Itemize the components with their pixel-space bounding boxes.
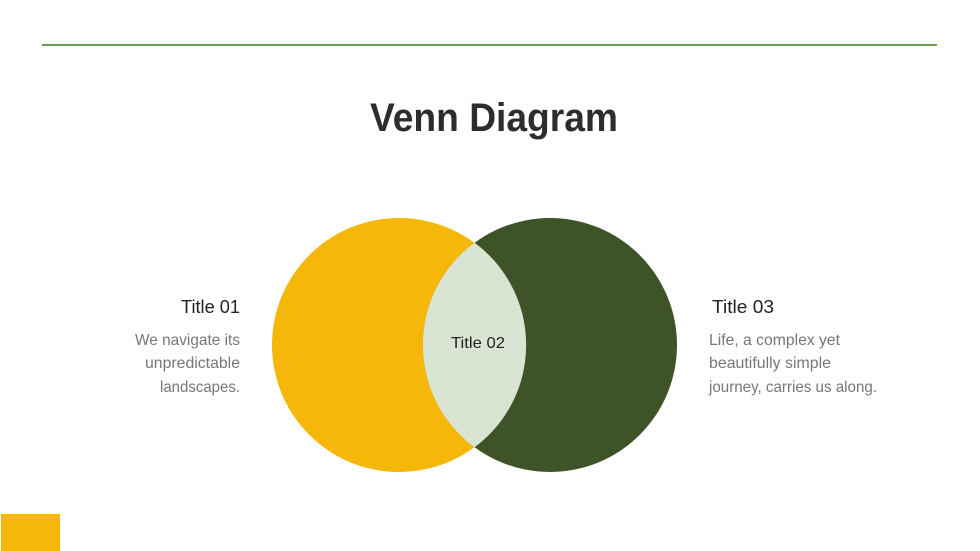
venn diagram: [272, 218, 677, 472]
body: left description: landscapes.: [160, 379, 240, 396]
intersection: overlap lens: [423, 243, 526, 447]
body: left description: We navigate its: [135, 332, 240, 349]
heading: Title 03: Title 03: [712, 296, 774, 317]
body: right description: journey, carries us along.: [708, 379, 877, 396]
body: right description: beautifully simple: [709, 355, 831, 372]
body: right description: Life, a complex yet: [709, 332, 841, 349]
right text block: [708, 296, 877, 396]
label: Title 02: Title 02: [451, 335, 505, 352]
heading: Title 01: Title 01: [181, 296, 240, 317]
left text block: [135, 296, 240, 396]
body: left description: unpredictable: [145, 355, 240, 372]
circle: left yellow: [272, 218, 526, 472]
body: left description: [135, 332, 240, 396]
body: right description: [708, 332, 877, 396]
circle: right green: [423, 218, 677, 472]
corner accent square: [1, 514, 60, 551]
title: Venn Diagram: [370, 96, 618, 140]
